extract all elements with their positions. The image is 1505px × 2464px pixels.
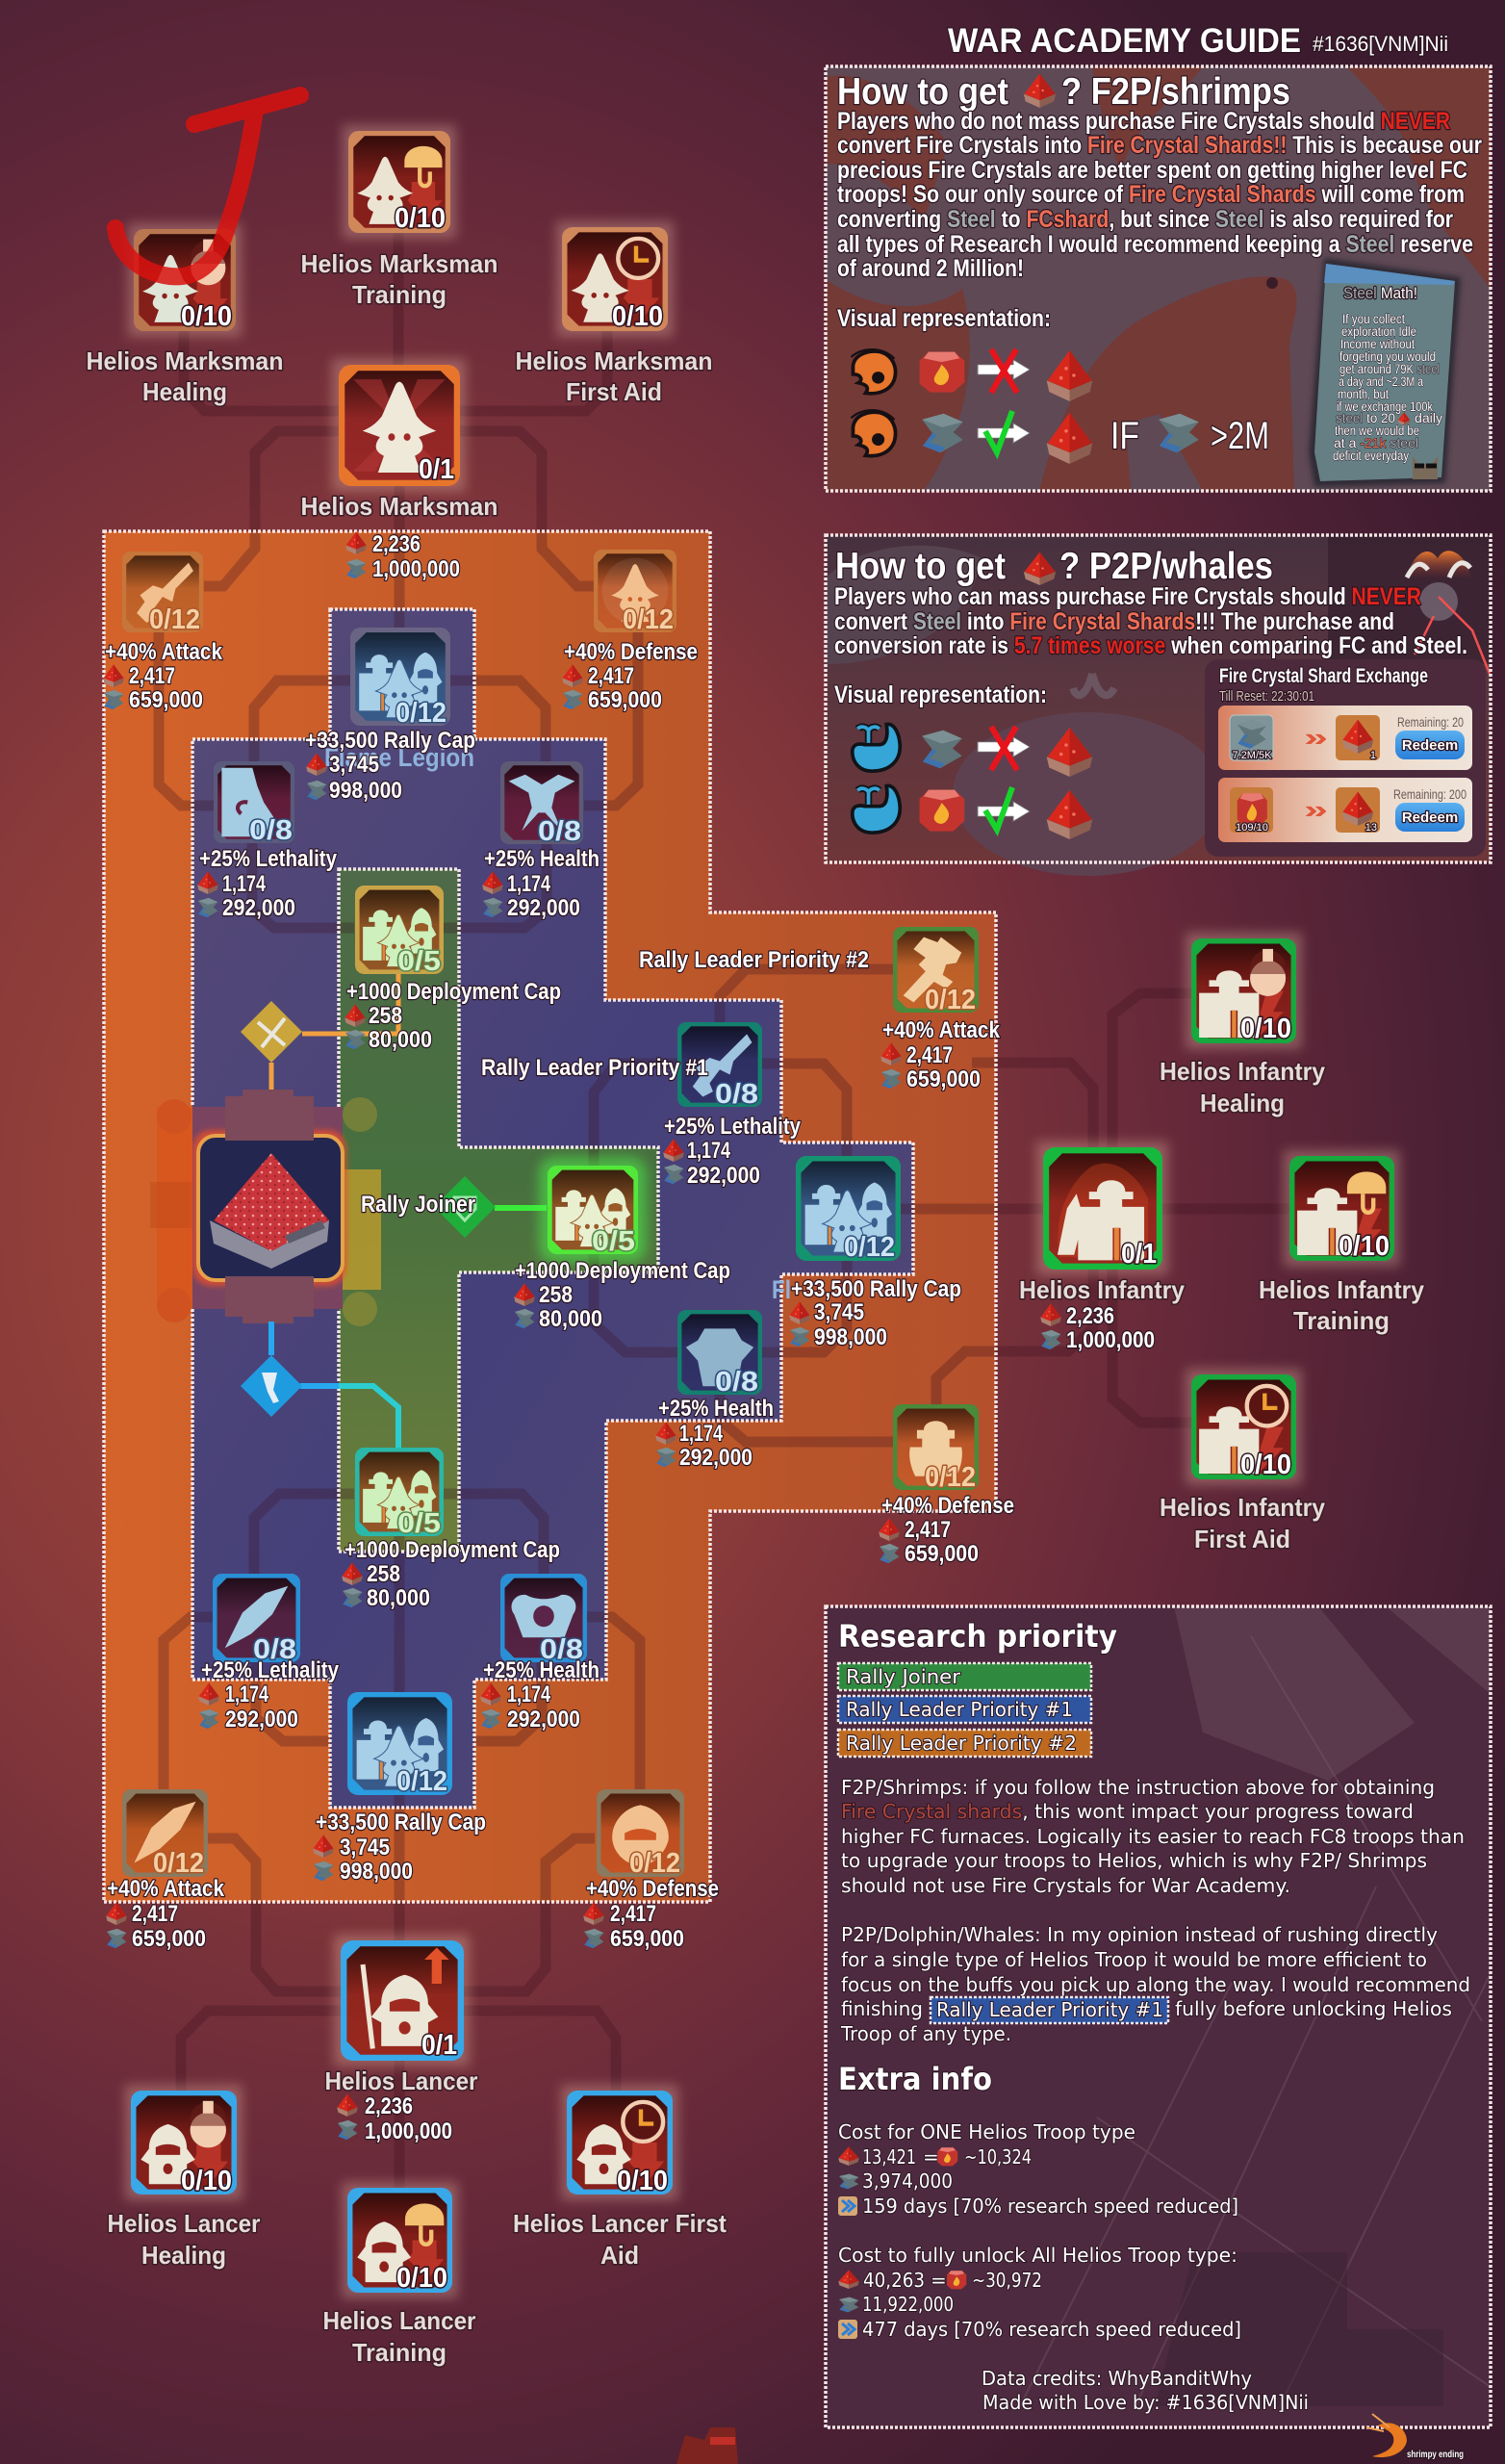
text block: P2P explanation: convert Steel into Fire Crystal Shards!!! The purchase and xyxy=(834,608,1394,635)
row: steel exchange xyxy=(1218,706,1472,770)
card: Steel Math: steel to 20 xyxy=(1336,411,1395,425)
label: Helios Lancer Training xyxy=(323,2306,475,2367)
text block: F2P advice: higher FC furnaces. Logically its easier to reach FC8 troops than xyxy=(841,1825,1465,1848)
heading: How to get F2P/shrimps: How to get xyxy=(837,71,1008,113)
stat: bottom lethality: 1,174 xyxy=(225,1681,268,1707)
text block: cost for all troop types: 11,922,000 xyxy=(862,2293,954,2316)
card: Steel Math: daily xyxy=(1415,411,1442,425)
text block: P2P explanation: conversion rate is 5.7 times worse when comparing FC and Steel. xyxy=(834,632,1467,659)
node: right lethality: 0/8 xyxy=(715,1079,758,1110)
row: steel exchange: Remaining: 20 xyxy=(1397,714,1464,730)
text block: P2P advice: fully before unlocking Helios xyxy=(1175,1997,1452,2020)
stat: right health xyxy=(655,1396,774,1471)
node: Helios Infantry: 0/1 xyxy=(1121,1239,1157,1270)
node: Helios Lancer Training: 0/10 xyxy=(396,2263,447,2294)
text block: cost for one troop type: ~10,324 xyxy=(964,2145,1032,2169)
icon: shrimp logo with caption xyxy=(1366,2414,1464,2460)
label: Rally Leader Priority #1: Rally Leader Priority #1 xyxy=(481,1055,708,1081)
stat: right health: 1,174 xyxy=(679,1421,723,1447)
label: Helios Marksman Training: Helios Marksman xyxy=(300,249,498,278)
stat: bottom health: +25% Health xyxy=(483,1657,599,1683)
stat: marksman attack: 659,000 xyxy=(129,687,203,713)
node: Helios Infantry xyxy=(1036,1142,1168,1275)
legend: Rally Joiner xyxy=(838,1663,1091,1690)
label: Helios Marksman First Aid: First Aid xyxy=(566,377,662,406)
icons: crystal to shards is wrong xyxy=(852,349,1092,401)
region: Rally Leader Priority #1 blue xyxy=(192,609,913,1808)
cost: Helios Infantry xyxy=(1040,1303,1155,1353)
node: Helios Marksman First Aid: 0/10 xyxy=(612,301,663,332)
icons: steel to shards is ok if over 2M xyxy=(852,410,1269,464)
cost: Helios Lancer xyxy=(337,2093,452,2144)
stat: marksman attack: +40% Attack xyxy=(105,639,223,665)
node: bottom rally cap: 0/12 xyxy=(396,1766,447,1797)
cost: Helios Lancer: 2,236 xyxy=(365,2093,413,2119)
label: Helios Infantry First Aid: Helios Infantry xyxy=(1160,1493,1326,1522)
node: right rally cap: 0/12 xyxy=(844,1232,895,1263)
icon: yellow marksman diamond with line to deployment node xyxy=(241,974,398,1090)
stat: bottom rally cap: +33,500 Rally Cap xyxy=(316,1810,486,1835)
card: Fire Crystal Shard Exchange xyxy=(1205,659,1486,857)
card: Steel Math: Steel Math! xyxy=(1343,284,1417,302)
label: Helios Lancer First Aid: Aid xyxy=(600,2241,639,2270)
node: Helios Infantry First Aid xyxy=(1186,1369,1302,1485)
stat: bottom deployment cap xyxy=(342,1537,560,1611)
node: bottom lethality xyxy=(213,1574,300,1665)
node: Helios Marksman Healing xyxy=(128,223,242,337)
label: Helios Marksman Training xyxy=(300,249,498,309)
stat: right rally cap: +33,500 Rally Cap xyxy=(791,1276,961,1302)
stat: lancer attack: 659,000 xyxy=(132,1926,206,1952)
icon: blue lancer diamond with line to deployment node xyxy=(241,1322,398,1448)
node: Helios Lancer Healing xyxy=(125,2085,242,2200)
node: marksman rally cap: 0/12 xyxy=(395,698,446,729)
stat: infantry defense: +40% Defense xyxy=(881,1493,1014,1519)
stat: bottom health xyxy=(480,1657,599,1732)
node: lancer defense xyxy=(597,1789,684,1879)
text: visual representation: Visual representation: xyxy=(837,305,1051,332)
stat: right health: +25% Health xyxy=(658,1396,774,1422)
stat: right lethality: +25% Lethality xyxy=(664,1114,802,1140)
title: WAR ACADEMY GUIDE xyxy=(948,22,1301,60)
label: Helios Infantry Healing: Helios Infantry xyxy=(1160,1057,1326,1086)
heading: How to get F2P/shrimps: ? F2P/shrimps xyxy=(1061,71,1290,113)
stat: lancer defense: 659,000 xyxy=(610,1926,684,1952)
stat: lancer defense: +40% Defense xyxy=(586,1876,719,1902)
label: Helios Infantry: Helios Infantry xyxy=(1019,1275,1186,1304)
text block: P2P advice: P2P/Dolphin/Whales: In my opinion instead of rushing directly xyxy=(841,1923,1438,1946)
stat: bottom deployment cap: +1000 Deployment Cap xyxy=(344,1537,560,1563)
label: Rally Leader Priority #2: Rally Leader Priority #2 xyxy=(639,947,869,973)
node: Helios Marksman xyxy=(332,359,466,492)
icons: steel to shards is ok if over 2M: IF xyxy=(1110,415,1139,457)
stat: top lethality xyxy=(197,846,338,921)
card: Steel Math: at a -21k steel xyxy=(1334,436,1418,450)
ghost label: Flame Legion: Flame Legion xyxy=(324,743,474,772)
stat: marksman attack: 2,417 xyxy=(129,663,175,689)
stat: bottom lethality xyxy=(198,1657,340,1732)
node: right health: 0/8 xyxy=(715,1367,758,1398)
stat: bottom lethality: 292,000 xyxy=(225,1707,298,1732)
node: top lethality xyxy=(214,761,294,846)
stat: top deployment cap: 80,000 xyxy=(369,1027,432,1053)
text block: P2P advice: Troop of any type. xyxy=(840,2022,1011,2045)
node: Helios Marksman Healing: 0/10 xyxy=(181,301,232,332)
stat: right lethality: 1,174 xyxy=(687,1138,730,1164)
text block: P2P advice: finishing xyxy=(841,1997,923,2020)
text block: P2P advice: for a single type of Helios Troop it would be more efficient to xyxy=(841,1948,1427,1971)
label: Helios Infantry Training xyxy=(1259,1275,1425,1335)
card: Steel Math: deficit everyday xyxy=(1333,449,1409,463)
region outlines: dashed borders xyxy=(104,531,996,1902)
stat: bottom deployment cap: 258 xyxy=(367,1561,400,1587)
stat: center deployment cap: +1000 Deployment Cap xyxy=(515,1258,730,1284)
row: fire crystal exchange: 109/10 xyxy=(1236,822,1268,834)
stat: infantry defense: 659,000 xyxy=(905,1541,979,1567)
node: bottom deployment cap: 0/5 xyxy=(397,1508,441,1539)
stat: marksman rally cap xyxy=(305,728,475,804)
stat: lancer defense: 2,417 xyxy=(610,1901,656,1927)
annotation: red hand-drawn J stroke xyxy=(115,95,300,276)
stat: infantry attack: 2,417 xyxy=(906,1042,953,1068)
card: Steel Math: exploration Idle xyxy=(1341,324,1416,339)
text block: P2P explanation xyxy=(834,583,1467,659)
label: Helios Marksman First Aid: Helios Marksman xyxy=(516,346,712,375)
heading: Extra info: Extra info xyxy=(838,2061,992,2097)
stat: marksman defense xyxy=(562,639,698,713)
node: top deployment cap: 0/5 xyxy=(397,946,441,977)
stat: top health: 292,000 xyxy=(507,895,580,921)
text block: credits: Made with Love by: #1636[VNM]Nii xyxy=(982,2391,1309,2414)
node: right rally cap xyxy=(796,1156,901,1263)
label: Helios Lancer: Helios Lancer xyxy=(325,2066,477,2095)
stat: top deployment cap: 258 xyxy=(369,1003,402,1029)
text block: cost for all troop types xyxy=(838,2244,1241,2341)
row: steel exchange: » xyxy=(1304,723,1328,752)
text block: F2P advice xyxy=(841,1776,1465,1897)
stat: lancer defense xyxy=(583,1876,719,1952)
text block: P2P explanation: Players who can mass purchase Fire Crystals should NEVER xyxy=(834,583,1421,610)
card: Steel Math: if we exchange 100k xyxy=(1337,399,1433,414)
stat: center deployment cap: 258 xyxy=(539,1282,573,1308)
label: Helios Lancer Healing: Helios Lancer xyxy=(108,2209,260,2238)
card: Steel Math: month, but xyxy=(1338,387,1389,401)
node: Helios Lancer First Aid: 0/10 xyxy=(617,2166,668,2196)
label: Helios Marksman: Helios Marksman xyxy=(300,492,498,521)
label: Helios Infantry Healing xyxy=(1160,1057,1326,1117)
node: infantry attack: 0/12 xyxy=(925,985,976,1015)
icons: steel to shards is wrong xyxy=(853,724,1092,777)
node: bottom health xyxy=(500,1574,587,1665)
stat: bottom rally cap: 3,745 xyxy=(340,1835,390,1861)
heading: How to get P2P/whales: ? P2P/whales xyxy=(1059,546,1273,587)
text block: cost for one troop type: 159 days [70% research speed reduced] xyxy=(862,2194,1238,2218)
node: top deployment cap xyxy=(355,886,444,977)
text block: credits: Data credits: WhyBanditWhy xyxy=(982,2367,1252,2390)
stat: lancer attack xyxy=(106,1876,225,1952)
node: Helios Lancer First Aid xyxy=(561,2085,678,2200)
label: Helios Lancer Training: Training xyxy=(352,2338,446,2367)
stat: top deployment cap xyxy=(344,979,561,1053)
panel: F2P/shrimps xyxy=(826,66,1491,491)
label: Helios Infantry Training: Training xyxy=(1293,1306,1390,1335)
stat: marksman defense: 2,417 xyxy=(588,663,634,689)
stat: right rally cap: Fl xyxy=(772,1275,791,1304)
node: Helios Lancer Healing: 0/10 xyxy=(181,2166,232,2196)
text block: P2P advice: focus on the buffs you pick up along the way. I would recommend xyxy=(841,1973,1470,1996)
text block: cost for all troop types: 40,263 xyxy=(863,2269,925,2292)
text block: cost for one troop type: Cost for ONE Helios Troop type xyxy=(838,2120,1135,2143)
text block: cost for all troop types: Cost to fully unlock All Helios Troop type: xyxy=(838,2244,1237,2267)
stat: infantry attack: 659,000 xyxy=(906,1066,981,1092)
stat: marksman defense: 659,000 xyxy=(588,687,662,713)
row: fire crystal exchange: » xyxy=(1304,795,1328,824)
icons: steel to shards is ok if over 2M: >2M xyxy=(1211,415,1269,457)
stat: bottom rally cap xyxy=(313,1810,486,1885)
card: Steel Math: Income without xyxy=(1340,337,1415,351)
heading: How to get P2P/whales xyxy=(835,546,1273,587)
node: top health: 0/8 xyxy=(538,816,581,847)
cost: Helios Marksman xyxy=(345,531,460,582)
stat: top lethality: +25% Lethality xyxy=(199,846,338,872)
card: Steel Math xyxy=(1309,258,1461,487)
row: steel exchange: 7.2M/5K xyxy=(1233,750,1272,761)
cost: Helios Infantry: 2,236 xyxy=(1066,1303,1114,1329)
stat: center deployment cap: 80,000 xyxy=(539,1306,602,1332)
node: top lethality: 0/8 xyxy=(249,815,293,846)
label: Helios Lancer First Aid xyxy=(513,2209,727,2270)
card: Steel Math: forgeting you would xyxy=(1339,349,1436,364)
heading: Research priority: Research priority xyxy=(838,1618,1117,1655)
node: Helios Lancer: 0/1 xyxy=(421,2030,457,2061)
stat: center deployment cap xyxy=(514,1258,730,1332)
node: right health xyxy=(677,1310,762,1398)
label: Helios Lancer Training: Helios Lancer xyxy=(323,2306,475,2335)
text block: cost for one troop type: 13,421 xyxy=(862,2145,916,2169)
node: infantry defense xyxy=(893,1404,979,1493)
stat: marksman rally cap: 998,000 xyxy=(329,778,402,804)
node: bottom rally cap xyxy=(347,1692,452,1797)
label: Helios Lancer First Aid: Helios Lancer First xyxy=(513,2209,727,2238)
label: Helios Infantry Training: Helios Infantry xyxy=(1259,1275,1425,1304)
text block: F2P advice: Fire Crystal shards, this wont impact your progress toward xyxy=(841,1800,1414,1823)
stat: infantry attack: +40% Attack xyxy=(882,1017,1001,1043)
node: center deployment cap (glowing): 0/5 xyxy=(592,1226,635,1257)
card: Steel Math: then we would be xyxy=(1335,424,1419,438)
label: Helios Infantry First Aid xyxy=(1160,1493,1326,1553)
cost: Helios Marksman: 2,236 xyxy=(372,531,421,557)
stat: marksman rally cap: 3,745 xyxy=(329,752,379,778)
text block: cost for one troop type: 3,974,000 xyxy=(862,2169,953,2193)
label: Helios Marksman Healing: Helios Marksman xyxy=(87,346,283,375)
node: lancer attack: 0/12 xyxy=(153,1848,204,1879)
node: bottom lethality: 0/8 xyxy=(253,1634,296,1665)
node: marksman attack xyxy=(122,552,203,635)
node: right lethality xyxy=(677,1022,762,1110)
icons: crystal to shards is ok xyxy=(853,785,1092,839)
legend: Rally Leader Priority #1: Rally Leader Priority #1 xyxy=(846,1698,1073,1721)
stat: infantry defense: 2,417 xyxy=(905,1517,951,1543)
node: top health xyxy=(500,761,583,847)
stat: marksman attack xyxy=(103,639,223,713)
cost: Helios Lancer: 1,000,000 xyxy=(365,2118,452,2144)
text block: F2P advice: F2P/Shrimps: if you follow the instruction above for obtaining xyxy=(841,1776,1435,1799)
text block: F2P explanation: of around 2 Million! xyxy=(837,255,1024,282)
text block: cost for all troop types: 477 days [70% research speed reduced] xyxy=(862,2318,1241,2341)
text block: F2P advice: to upgrade your troops to Helios, which is why F2P/ Shrimps xyxy=(841,1849,1427,1872)
title: #1636[VNM]Nii xyxy=(1313,32,1448,56)
text block: P2P advice: Rally Leader Priority #1 xyxy=(936,1998,1163,2021)
text block: F2P advice: should not use Fire Crystals for War Academy. xyxy=(841,1874,1290,1897)
stat: lancer attack: +40% Attack xyxy=(107,1876,225,1902)
row: steel exchange: 1 xyxy=(1370,750,1376,761)
icon: green infantry diamond with line xyxy=(434,1176,547,1238)
text: visual representation: Visual representation: xyxy=(834,681,1047,708)
card: Steel Math: a day and ~2.3M a xyxy=(1339,374,1423,389)
node: marksman defense xyxy=(594,550,676,635)
node: marksman rally cap xyxy=(350,628,450,729)
node: center deployment cap (glowing) xyxy=(539,1157,647,1263)
node: Helios Infantry First Aid: 0/10 xyxy=(1240,1450,1291,1480)
region: Rally Leader Priority #2 orange xyxy=(104,531,996,1902)
stat: right lethality xyxy=(663,1114,802,1189)
label: Helios Lancer Healing xyxy=(108,2209,260,2270)
label: Helios Infantry Healing: Healing xyxy=(1200,1089,1285,1117)
node: Helios Infantry Training xyxy=(1284,1150,1400,1267)
stat: bottom health: 292,000 xyxy=(507,1707,580,1732)
stat: bottom deployment cap: 80,000 xyxy=(367,1585,430,1611)
node: infantry defense: 0/12 xyxy=(925,1462,976,1493)
row: steel exchange: Redeem xyxy=(1402,737,1458,754)
row: fire crystal exchange: 13 xyxy=(1365,822,1377,834)
card: Steel Math: If you collect xyxy=(1342,312,1405,326)
icon: furnace with fire crystal shards xyxy=(150,1090,381,1326)
stat: right rally cap: 998,000 xyxy=(814,1324,887,1350)
panel: P2P/whales xyxy=(826,535,1491,876)
stat: top health: +25% Health xyxy=(484,846,599,872)
text block: credits xyxy=(982,2367,1309,2414)
stat: bottom lethality: +25% Lethality xyxy=(201,1657,340,1683)
stat: infantry attack xyxy=(880,1017,1001,1092)
stat: top health xyxy=(482,846,599,921)
node: lancer defense: 0/12 xyxy=(629,1848,680,1879)
node: Helios Infantry Healing xyxy=(1186,933,1302,1049)
text block: P2P advice xyxy=(840,1923,1470,2045)
text block: cost for one troop type: = xyxy=(923,2145,939,2169)
stat: right rally cap xyxy=(772,1275,961,1350)
stat: infantry defense xyxy=(879,1493,1014,1567)
node: Helios Lancer xyxy=(334,1935,470,2066)
cost: Helios Marksman: 1,000,000 xyxy=(372,556,460,582)
card: Fire Crystal Shard Exchange: Fire Crystal Shard Exchange xyxy=(1219,665,1428,687)
stat: top deployment cap: +1000 Deployment Cap xyxy=(346,979,561,1005)
label: Helios Marksman First Aid xyxy=(516,346,712,406)
node: Helios Marksman Training xyxy=(343,125,456,239)
region: Rally Joiner green xyxy=(339,869,658,1552)
node: marksman attack: 0/12 xyxy=(149,604,200,635)
text block: F2P explanation: troops! So our only source of Fire Crystal Shards will come from xyxy=(837,181,1465,208)
heading: How to get P2P/whales: How to get xyxy=(835,546,1006,587)
stat: top lethality: 292,000 xyxy=(222,895,295,921)
legend: Rally Joiner: Rally Joiner xyxy=(846,1665,961,1688)
stat: right rally cap: 3,745 xyxy=(814,1299,864,1325)
stat: lancer attack: 2,417 xyxy=(132,1901,178,1927)
label: Helios Lancer Healing: Healing xyxy=(141,2241,226,2270)
node: Helios Lancer Training xyxy=(342,2182,458,2298)
heading: How to get F2P/shrimps xyxy=(837,71,1290,113)
connectors: research tree lines xyxy=(159,233,1289,2188)
text block: F2P explanation: Players who do not mass purchase Fire Crystals should NEVER xyxy=(837,108,1450,135)
row: fire crystal exchange xyxy=(1218,778,1472,842)
node: Helios Infantry Training: 0/10 xyxy=(1339,1231,1390,1262)
node: Helios Marksman Training: 0/10 xyxy=(395,203,446,234)
node: infantry attack xyxy=(893,927,979,1015)
cost: Helios Infantry: 1,000,000 xyxy=(1066,1327,1155,1353)
label: Helios Marksman Training: Training xyxy=(352,280,446,309)
row: fire crystal exchange: Redeem xyxy=(1402,809,1458,826)
label: Helios Marksman Healing xyxy=(87,346,283,406)
legend: Rally Leader Priority #2: Rally Leader Priority #2 xyxy=(846,1732,1077,1755)
stat: top health: 1,174 xyxy=(507,871,550,897)
node: Helios Marksman First Aid xyxy=(556,221,674,337)
decoration: red creature at bottom xyxy=(676,2427,738,2464)
stat: marksman defense: +40% Defense xyxy=(564,639,698,665)
panel: research priority and extra info xyxy=(826,1606,1491,2427)
text block: F2P explanation: converting Steel to FCshard, but since Steel is also required for xyxy=(837,206,1453,233)
icon: shrimp logo with caption: shrimpy ending xyxy=(1407,2450,1464,2460)
stat: right health: 292,000 xyxy=(679,1445,752,1471)
node: Helios Infantry Healing: 0/10 xyxy=(1240,1014,1291,1044)
label: Helios Infantry First Aid: First Aid xyxy=(1194,1525,1290,1553)
stat: bottom rally cap: 998,000 xyxy=(340,1859,413,1885)
text block: cost for one troop type xyxy=(838,2120,1238,2218)
text block: cost for all troop types: = xyxy=(931,2269,947,2292)
row: fire crystal exchange: Remaining: 200 xyxy=(1393,786,1467,802)
node: lancer attack xyxy=(122,1789,208,1879)
card: Steel Math: get around 79K steel xyxy=(1339,362,1440,376)
label: Rally Joiner: Rally Joiner xyxy=(361,1192,475,1218)
label: Helios Marksman Healing: Healing xyxy=(142,377,227,406)
stat: top lethality: 1,174 xyxy=(222,871,266,897)
text block: F2P explanation: convert Fire Crystals into Fire Crystal Shards!! This is because our xyxy=(837,132,1482,159)
node: Helios Marksman: 0/1 xyxy=(419,454,454,485)
node: bottom health: 0/8 xyxy=(540,1634,583,1665)
node: bottom deployment cap xyxy=(355,1448,444,1539)
stat: bottom health: 1,174 xyxy=(507,1681,550,1707)
text block: F2P explanation xyxy=(837,108,1482,282)
card: Fire Crystal Shard Exchange: Till Reset: 22:30:01 xyxy=(1219,688,1314,705)
text block: cost for all troop types: ~30,972 xyxy=(972,2269,1042,2292)
node: marksman defense: 0/12 xyxy=(623,604,674,635)
stat: marksman rally cap: +33,500 Rally Cap xyxy=(305,728,475,754)
text block: F2P explanation: all types of Research I would recommend keeping a Steel reserve xyxy=(837,231,1473,258)
stat: right lethality: 292,000 xyxy=(687,1163,760,1189)
